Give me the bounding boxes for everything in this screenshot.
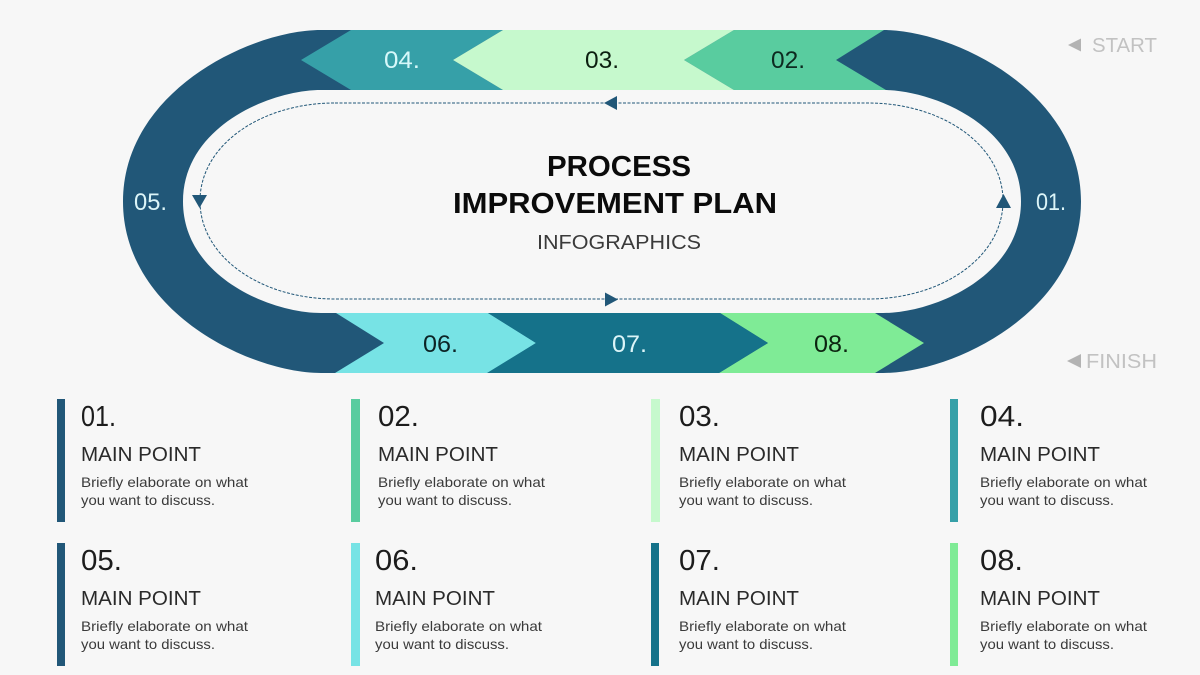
title block — [453, 151, 777, 254]
card 06 body: you want to discuss. — [375, 636, 509, 652]
card 06 bar — [351, 543, 360, 666]
start marker — [1068, 35, 1157, 57]
card 08 — [950, 543, 1147, 666]
card 08 heading: MAIN POINT — [980, 588, 1100, 610]
card 04 body: Briefly elaborate on what — [980, 474, 1147, 490]
start triangle — [1068, 38, 1081, 52]
chevron 02 — [684, 30, 886, 90]
label 05: 05. — [134, 189, 167, 216]
arrow: top, pointing left — [604, 96, 617, 110]
label 06: 06. — [423, 331, 458, 358]
label 08: 08. — [814, 331, 849, 358]
card 07 number: 07. — [679, 545, 720, 577]
card 02 bar — [351, 399, 360, 522]
card 04 number: 04. — [980, 401, 1024, 433]
card 07 — [651, 543, 846, 666]
card 01 heading: MAIN POINT — [81, 444, 201, 466]
card 03 heading: MAIN POINT — [679, 444, 799, 466]
card 04 heading: MAIN POINT — [980, 444, 1100, 466]
subtitle: INFOGRAPHICS — [537, 231, 701, 254]
card 03 body: Briefly elaborate on what — [679, 474, 846, 490]
chevron 08 — [719, 313, 924, 373]
card 01 number: 01. — [81, 401, 116, 433]
label 02: 02. — [771, 47, 805, 74]
oval process track — [123, 30, 1081, 373]
chevron 04 — [301, 30, 503, 90]
card 08 body: Briefly elaborate on what — [980, 618, 1147, 634]
chevron 06 — [335, 313, 536, 373]
card 07 heading: MAIN POINT — [679, 588, 799, 610]
card 06 heading: MAIN POINT — [375, 588, 495, 610]
card 02 body: Briefly elaborate on what — [378, 474, 545, 490]
card 01 body: Briefly elaborate on what — [81, 474, 248, 490]
card 05 body: you want to discuss. — [81, 636, 215, 652]
start text: START — [1092, 35, 1157, 57]
arrow: bottom, pointing right — [605, 292, 618, 306]
card 04 — [950, 399, 1147, 522]
card 06 body: Briefly elaborate on what — [375, 618, 542, 634]
label 07: 07. — [612, 331, 647, 358]
card 08 bar — [950, 543, 958, 666]
card 03 — [651, 399, 846, 522]
arrow: right, pointing up — [996, 194, 1011, 208]
card 03 number: 03. — [679, 401, 720, 433]
card 02 number: 02. — [378, 401, 419, 433]
card 07 body: you want to discuss. — [679, 636, 813, 652]
chevron 03 — [453, 30, 734, 90]
card 08 body: you want to discuss. — [980, 636, 1114, 652]
card 02 body: you want to discuss. — [378, 492, 512, 508]
label 01: 01. — [1036, 189, 1066, 216]
card 02 — [351, 399, 545, 522]
finish marker — [1067, 351, 1157, 373]
card 05 number: 05. — [81, 545, 122, 577]
card 01 — [57, 399, 248, 522]
dashed inner loop with arrows — [192, 96, 1011, 306]
title line 1: PROCESS — [547, 151, 691, 183]
card 03 body: you want to discuss. — [679, 492, 813, 508]
label 03: 03. — [585, 47, 619, 74]
card 01 bar — [57, 399, 65, 522]
chevron 07 — [487, 313, 768, 373]
title line 2: IMPROVEMENT PLAN — [453, 188, 777, 220]
card 07 body: Briefly elaborate on what — [679, 618, 846, 634]
card 02 heading: MAIN POINT — [378, 444, 498, 466]
card 05 heading: MAIN POINT — [81, 588, 201, 610]
finish triangle — [1067, 354, 1081, 368]
card 05 body: Briefly elaborate on what — [81, 618, 248, 634]
card 03 bar — [651, 399, 660, 522]
dashed loop path — [200, 103, 1003, 299]
card 04 body: you want to discuss. — [980, 492, 1114, 508]
arrow: left, pointing down — [192, 195, 207, 208]
card 06 number: 06. — [375, 545, 418, 577]
label 04: 04. — [384, 47, 420, 74]
finish text: FINISH — [1086, 351, 1157, 373]
card 07 bar — [651, 543, 659, 666]
card 08 number: 08. — [980, 545, 1023, 577]
navy ring — [123, 30, 1081, 373]
card 04 bar — [950, 399, 958, 522]
card 01 body: you want to discuss. — [81, 492, 215, 508]
card 05 bar — [57, 543, 65, 666]
card 06 — [351, 543, 542, 666]
card 05 — [57, 543, 248, 666]
